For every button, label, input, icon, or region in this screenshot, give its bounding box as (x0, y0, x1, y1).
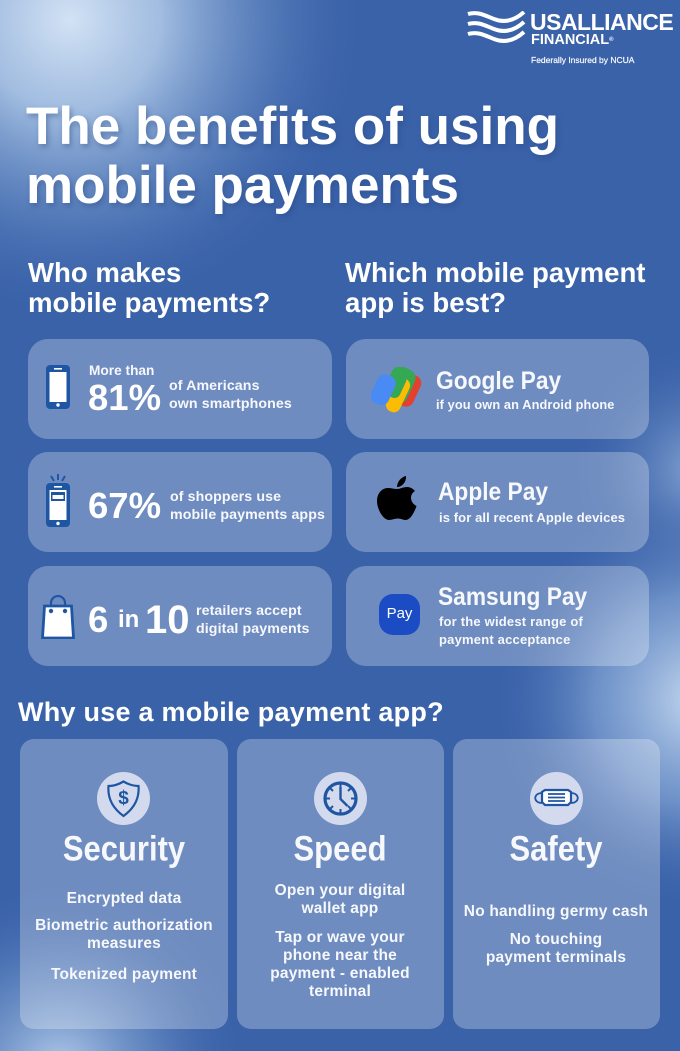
text: widest range: for the widest range of (439, 614, 583, 629)
heading: who makes mobile payments: mobile payments? (28, 287, 270, 318)
icon: Apple (377, 476, 416, 520)
text: Apple devices: is for all recent Apple devices (439, 510, 625, 525)
heading: which app is best: Which mobile payment (345, 257, 646, 288)
text: of shoppers: of shoppers use (170, 489, 281, 505)
text: terminals: No touching (510, 931, 602, 948)
text: terminals (486, 931, 626, 966)
text: terminals: payment terminals (486, 949, 626, 966)
text: tap or wave: payment - enabled (270, 965, 410, 982)
text: biometric: measures (87, 935, 161, 952)
title: mobile payments (26, 156, 459, 215)
app name: Apple Pay: Apple Pay (438, 478, 548, 506)
panel: Google Pay (346, 339, 649, 439)
text: tap or wave: phone near the (283, 947, 397, 964)
text: widest range: payment acceptance (439, 632, 570, 647)
heading: why use: Why use a mobile payment app? (18, 697, 444, 727)
icon: mask (530, 772, 583, 825)
panel: Speed (237, 739, 444, 1029)
title: The benefits of using (26, 97, 559, 156)
app name: Samsung Pay: Samsung Pay (438, 583, 587, 611)
panel: 81% smartphones (28, 339, 332, 439)
icon: smartphone (46, 365, 70, 409)
text: of shoppers (170, 489, 325, 523)
text: of Americans: own smartphones (169, 396, 292, 412)
heading: which app is best (345, 257, 646, 318)
stat: 81%: 81% (88, 377, 161, 418)
heading: Security: Security (63, 828, 185, 868)
text: Android: if you own an Android phone (436, 397, 615, 412)
icon: shopping bag (41, 595, 75, 639)
panel: 67% shoppers (28, 452, 332, 552)
icon: payment phone (46, 474, 70, 527)
text: tap or wave: terminal (309, 983, 371, 1000)
text: retailers (196, 603, 310, 637)
icon: Google Pay (371, 367, 422, 412)
text: more than: More than (89, 363, 154, 378)
panel: 6 in 10 retailers (28, 566, 332, 666)
icon: Samsung Pay: Pay (387, 605, 412, 622)
panel: Safety (453, 739, 660, 1029)
logo wordmark: USALLIANCE (530, 9, 673, 35)
icon: waves (468, 11, 526, 43)
panel: Samsung Pay (346, 566, 649, 666)
heading: which app is best: app is best? (345, 287, 506, 318)
text: of Americans (169, 378, 292, 412)
logo: USAlliance Financial (468, 9, 673, 65)
text: of shoppers: mobile payments apps (170, 507, 325, 523)
text: tap or wave (270, 929, 410, 1000)
icon: shield (97, 772, 150, 825)
text: open wallet: Open your digital (275, 882, 405, 899)
heading: who makes mobile payments: Who makes (28, 257, 181, 288)
heading: Speed: Speed (293, 828, 387, 868)
list: safety (464, 903, 648, 966)
title (26, 97, 559, 217)
icon: clock (314, 772, 367, 825)
icon: shield: $ (118, 788, 129, 809)
heading: who makes mobile payments (28, 257, 270, 318)
panel: Security (20, 739, 228, 1029)
list: security (35, 890, 213, 983)
text: of Americans: of Americans (169, 378, 260, 394)
NCUA note: Federally Insured by NCUA (531, 55, 634, 65)
text: tap or wave: Tap or wave your (275, 929, 405, 946)
logo subline: FINANCIAL® (531, 32, 614, 48)
stat: 6 in 10 (88, 598, 190, 642)
text: retailers: digital payments (196, 621, 310, 637)
text: open wallet (275, 882, 405, 917)
text: encrypted: Encrypted data (67, 890, 181, 907)
text: retailers: retailers accept (196, 603, 302, 619)
stat: 67%: 67% (88, 485, 161, 526)
panel: Apple Pay (346, 452, 649, 552)
stat: 6 in 10: 6 (88, 599, 108, 640)
text: open wallet: wallet app (302, 900, 378, 917)
list: speed (270, 882, 410, 1000)
heading: Safety: Safety (509, 828, 603, 868)
app name: Google Pay: Google Pay (436, 367, 561, 395)
stat: 6 in 10: in (118, 606, 139, 633)
text: tokenized: Tokenized payment (51, 966, 197, 983)
text: biometric: Biometric authorization (35, 917, 213, 934)
text: biometric (35, 917, 213, 952)
stat: 6 in 10: 10 (145, 598, 190, 642)
text: widest range (439, 614, 583, 647)
text: germy cash: No handling germy cash (464, 903, 648, 920)
icon: Samsung Pay (379, 594, 420, 635)
